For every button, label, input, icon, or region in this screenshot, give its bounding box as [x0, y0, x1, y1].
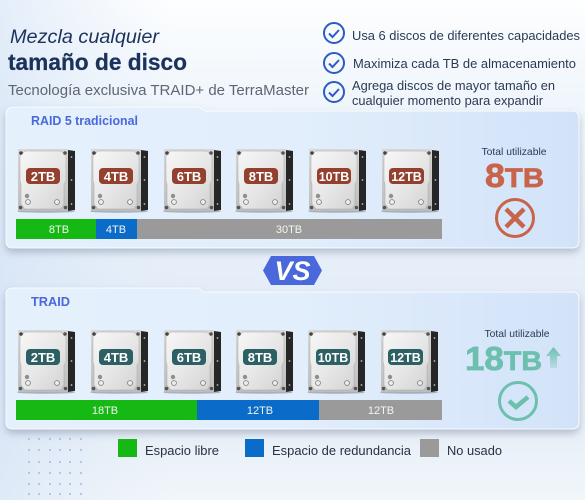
feature 3: [324, 78, 555, 108]
VS badge: VS: [274, 256, 311, 286]
capacity bar: 30TB: [276, 224, 302, 236]
legend: free space: Espacio libre: [145, 443, 219, 458]
disk: 12TB: [380, 330, 438, 394]
title line 2: tamaño de disco: [8, 49, 187, 75]
legend: unused: [420, 439, 502, 458]
legend: unused: No usado: [447, 443, 502, 458]
panel heading: RAID 5 tradicional: [31, 114, 138, 128]
feature 1: Usa 6 discos de diferentes capacidades: [352, 28, 580, 43]
disk: 2TB: [17, 330, 75, 394]
disk: 4TB: [90, 149, 148, 213]
legend: [118, 439, 502, 458]
capacity bar: 12TB: [368, 405, 394, 417]
disk: 4TB: 4TB: [104, 169, 128, 184]
disk: 12TB: 12TB: [391, 170, 422, 184]
icon: up arrow: [546, 347, 561, 368]
VS badge: [263, 256, 322, 286]
panel: TRAID: [6, 288, 579, 429]
feature 3: cualquier momento para expandir: [352, 93, 544, 108]
disk: 8TB: [235, 330, 293, 394]
disk: 10TB: 10TB: [319, 170, 349, 184]
capacity bar: 4TB: [106, 224, 126, 236]
feature 3: Agrega discos de mayor tamaño en: [352, 78, 555, 93]
feature 2: Maximiza cada TB de almacenamiento: [353, 56, 576, 71]
panel heading: TRAID: [31, 295, 70, 309]
disk: 6TB: 6TB: [177, 350, 201, 365]
capacity bar: 12TB: [247, 405, 273, 417]
legend: redundancy space: Espacio de redundancia: [272, 443, 412, 458]
total usable: [465, 328, 550, 377]
title line 1: Mezcla cualquier: [10, 27, 160, 48]
icon: check: [500, 382, 536, 420]
capacity bar: [16, 400, 442, 420]
title block: [8, 27, 309, 99]
disk: 8TB: 8TB: [249, 169, 273, 184]
disk: 4TB: [90, 330, 148, 394]
disk: 12TB: 12TB: [390, 351, 421, 365]
subtitle: Tecnología exclusiva TRAID+ de TerraMaster: [8, 82, 309, 99]
disk: 2TB: 2TB: [31, 169, 55, 184]
disk: 6TB: 6TB: [177, 169, 201, 184]
disk: 8TB: 8TB: [248, 350, 272, 365]
total usable: [482, 146, 547, 194]
disk: 10TB: [308, 149, 366, 213]
total usable: Total utilizable: [484, 328, 550, 340]
feature 2: [324, 53, 576, 73]
dot pattern: [28, 438, 82, 495]
legend: free space: [118, 439, 219, 458]
disk: 4TB: 4TB: [104, 350, 128, 365]
disk: 6TB: [163, 149, 221, 213]
disk: 10TB: [307, 330, 365, 394]
disk: 2TB: 2TB: [31, 350, 55, 365]
capacity bar: 18TB: [92, 405, 118, 417]
capacity bar: [16, 219, 442, 239]
total usable: Total utilizable: [482, 146, 547, 158]
panel: RAID 5 tradicional: [6, 107, 579, 248]
icon: cross: [496, 200, 534, 236]
legend: redundancy space: [245, 439, 412, 458]
feature 1: [324, 23, 580, 43]
disk: 6TB: [163, 330, 221, 394]
feature list: [324, 23, 580, 108]
disk: 2TB: [17, 149, 75, 213]
capacity bar: 8TB: [49, 224, 69, 236]
total usable: 8TB: [485, 157, 544, 194]
disk: 12TB: [381, 149, 439, 213]
disk: 8TB: [235, 149, 293, 213]
disk: 10TB: 10TB: [318, 351, 348, 365]
total usable: 18TB: [465, 340, 542, 377]
